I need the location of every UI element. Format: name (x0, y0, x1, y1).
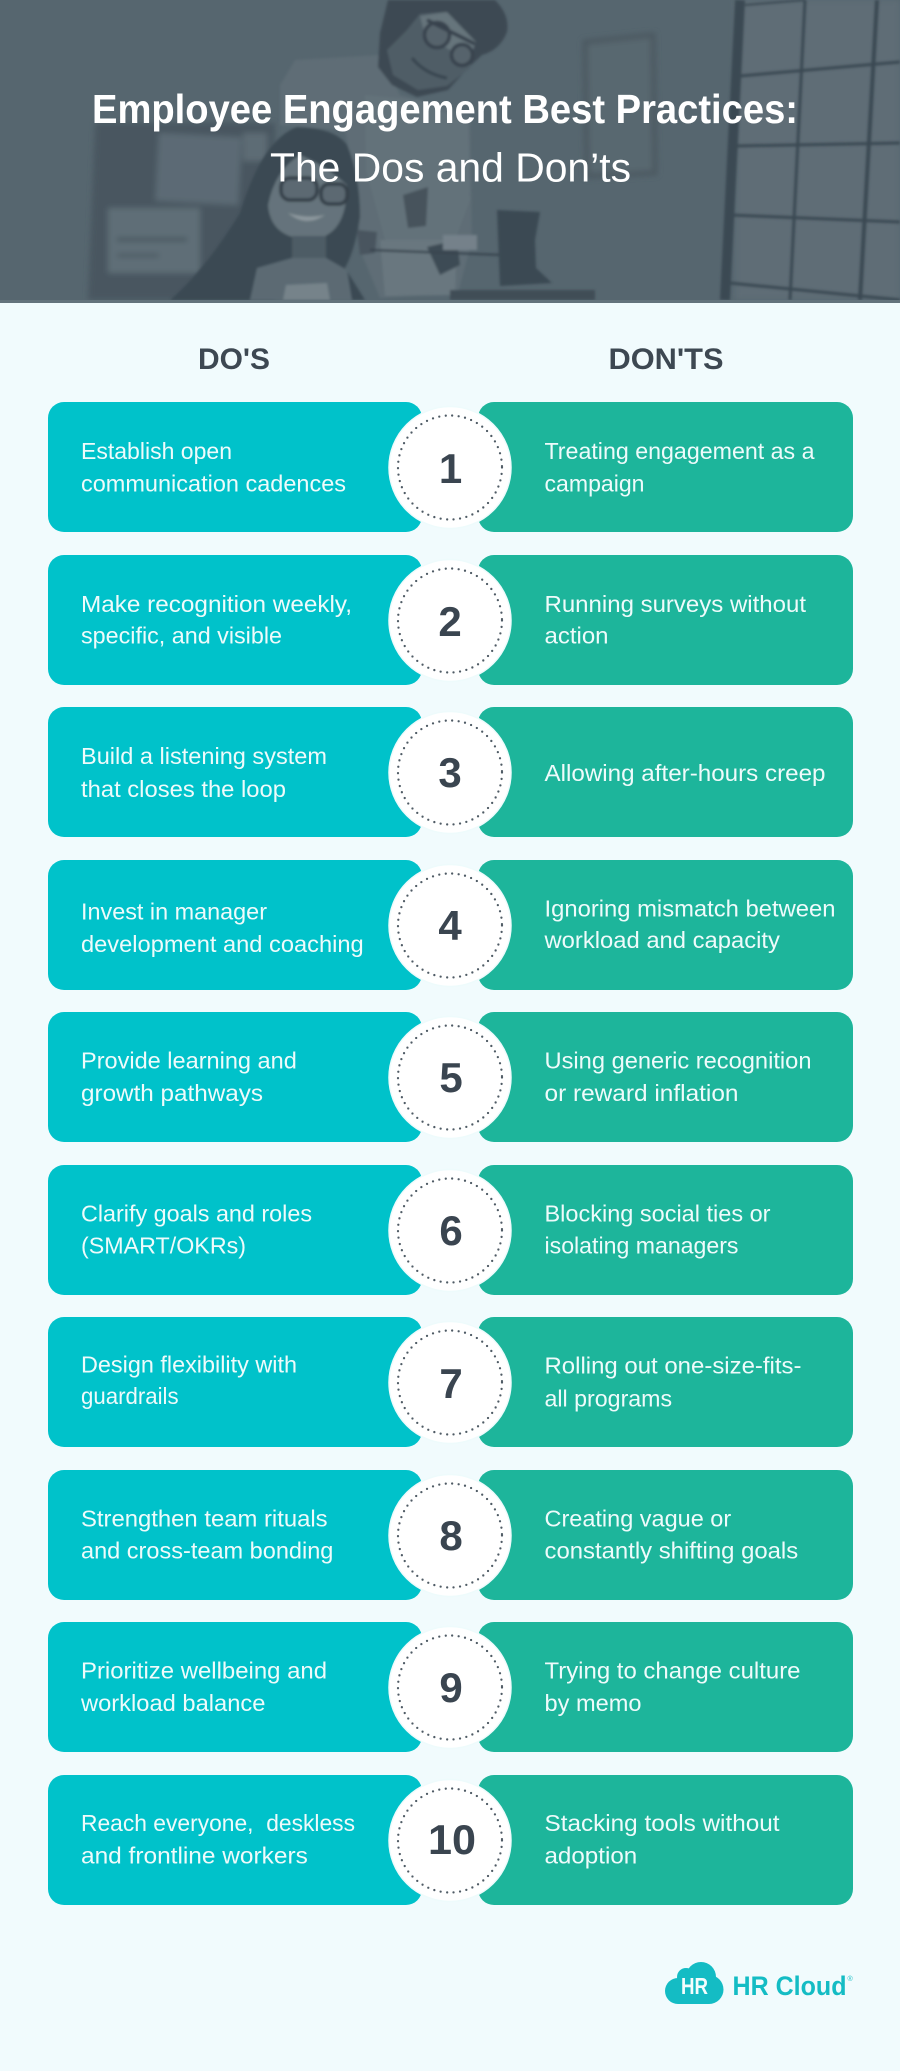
card: don't 1: Treating engagement as a (544, 438, 815, 464)
heading: don'ts: DON'TS (608, 343, 724, 376)
number badge 10 (389, 1780, 511, 1902)
row 3 (48, 707, 853, 837)
icon: cloud: HR (681, 1973, 708, 1999)
card: don't 10: adoption (544, 1842, 637, 1868)
number badge 2 (389, 560, 511, 682)
row 10 (48, 1775, 853, 1905)
card: don't 3 (478, 707, 853, 837)
card: do 5: Provide learning and (81, 1048, 297, 1074)
card: do 8: and cross-team bonding (81, 1538, 333, 1564)
row 9 (48, 1622, 853, 1752)
heading: do's: DO'S (198, 343, 270, 376)
card: do 4: Invest in manager (81, 898, 267, 924)
card: do 10 (48, 1775, 422, 1905)
card: do 9: workload balance (80, 1690, 265, 1716)
icon: cloud (665, 1962, 724, 2004)
card: don't 5: Using generic recognition (544, 1048, 812, 1074)
card: don't 9: by memo (544, 1690, 642, 1716)
card: do 2: specific, and visible (81, 622, 282, 648)
row 5 (48, 1012, 853, 1142)
card: do 3: that closes the loop (81, 776, 286, 802)
card: don't 2 (478, 555, 853, 685)
title: The Dos and Don’ts (270, 144, 631, 190)
number badge 8: 8 (439, 1512, 463, 1559)
card: do 1: communication cadences (81, 470, 346, 496)
card: do 2 (48, 555, 422, 685)
number badge 2: 2 (438, 598, 462, 645)
number badge 8 (389, 1474, 511, 1596)
card: don't 5 (478, 1012, 853, 1142)
window frame grid (725, 0, 900, 300)
number badge 3: 3 (438, 749, 462, 796)
card: do 5: growth pathways (81, 1080, 263, 1106)
row 4 (48, 860, 853, 990)
card: do 10: Reach everyone, deskless (81, 1810, 355, 1836)
card: don't 3: Allowing after-hours creep (544, 760, 826, 786)
title (92, 86, 798, 190)
card: don't 4: workload and capacity (543, 927, 780, 953)
card: don't 8: constantly shifting goals (544, 1538, 798, 1564)
card: do 4 (48, 860, 422, 990)
card: do 9 (48, 1622, 422, 1752)
card: don't 9: Trying to change culture (544, 1658, 800, 1684)
number badge 9: 9 (439, 1664, 463, 1711)
card: do 5 (48, 1012, 422, 1142)
panel: header photo banner (0, 0, 900, 303)
man's hair and head (378, 0, 508, 97)
card: don't 4: Ignoring mismatch between (544, 896, 836, 922)
card: do 8: Strengthen team rituals (81, 1506, 328, 1532)
card: don't 7: all programs (544, 1386, 672, 1412)
number badge 6 (389, 1170, 511, 1292)
number badge 4 (389, 864, 511, 986)
card: do 4: development and coaching (81, 931, 364, 957)
card: do 6: Clarify goals and roles (81, 1200, 312, 1226)
card: don't 6 (478, 1165, 853, 1295)
card: don't 2: Running surveys without (544, 591, 807, 617)
card: don't 2: action (544, 622, 608, 648)
row 8 (48, 1470, 853, 1600)
card: do 7 (48, 1317, 422, 1447)
card: do 1 (48, 402, 422, 532)
card: do 3: Build a listening system (81, 743, 327, 769)
row 6 (48, 1165, 853, 1295)
card: don't 8: Creating vague or (544, 1506, 732, 1532)
card: do 8 (48, 1470, 422, 1600)
card: don't 10: Stacking tools without (544, 1810, 780, 1836)
card: don't 1: campaign (544, 470, 644, 496)
number badge 1: 1 (439, 445, 462, 492)
number badge 6: 6 (439, 1207, 463, 1254)
card: don't 7: Rolling out one-size-fits- (544, 1352, 802, 1378)
card: don't 9 (478, 1622, 853, 1752)
row 2 (48, 555, 853, 685)
number badge 9 (389, 1626, 511, 1748)
number badge 10: 10 (428, 1816, 476, 1863)
card: do 9: Prioritize wellbeing and (81, 1658, 327, 1684)
card: do 1: Establish open (81, 438, 232, 464)
card: don't 1 (478, 402, 853, 532)
number badge 7 (389, 1322, 511, 1444)
card: don't 6: isolating managers (544, 1232, 738, 1258)
man's shirt (280, 55, 472, 298)
row 7 (48, 1317, 853, 1447)
registered mark: ® (848, 1975, 854, 1983)
card: do 2: Make recognition weekly, (81, 591, 352, 617)
card: do 10: and frontline workers (81, 1842, 308, 1868)
number badge 1 (389, 406, 511, 528)
row 1 (48, 402, 853, 532)
logo: HR Cloud (665, 1962, 854, 2004)
card: don't 4 (478, 860, 853, 990)
card: don't 5: or reward inflation (544, 1080, 738, 1106)
title: Employee Engagement Best Practices: (92, 86, 798, 132)
card: do 6 (48, 1165, 422, 1295)
card: don't 8 (478, 1470, 853, 1600)
card: do 3 (48, 707, 422, 837)
card: don't 10 (478, 1775, 853, 1905)
card: do 6: (SMART/OKRs) (81, 1232, 246, 1258)
hand, pen and desk objects (357, 230, 377, 255)
number badge 4: 4 (438, 902, 462, 949)
number badge 5 (389, 1016, 511, 1138)
number badge 3 (389, 712, 511, 834)
wordmark: HR Cloud (732, 1971, 846, 2001)
number badge 7: 7 (439, 1360, 463, 1407)
card: don't 6: Blocking social ties or (544, 1200, 771, 1226)
card: do 7: guardrails (81, 1383, 179, 1409)
card: don't 7 (478, 1317, 853, 1447)
number badge 5: 5 (439, 1054, 463, 1101)
card: do 7: Design flexibility with (81, 1352, 297, 1378)
woman's hair and head (170, 127, 365, 300)
